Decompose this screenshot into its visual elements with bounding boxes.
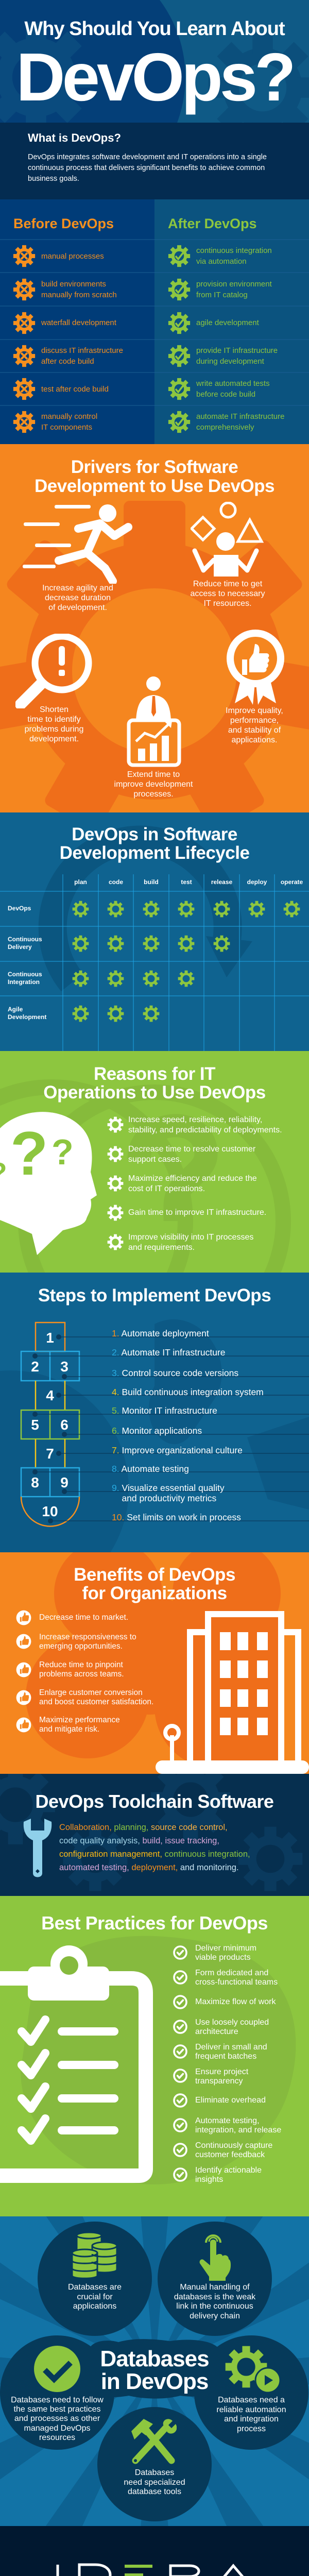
list: practices: Form dedicated and xyxy=(195,1969,268,1977)
heading: steps: Steps to Implement DevOps xyxy=(38,1285,271,1306)
hopscotch diagram: 9 xyxy=(60,1475,68,1490)
text: automation: process xyxy=(237,2425,266,2433)
hopscotch diagram: 7 xyxy=(46,1446,54,1462)
column headers: test xyxy=(181,878,192,886)
text: databases crucial: applications xyxy=(73,2302,116,2311)
icon: gear and play xyxy=(225,2345,282,2394)
list: steps: 10. Set limits on work in process xyxy=(112,1512,241,1522)
hopscotch diagram xyxy=(21,1322,309,1527)
text: manual handling xyxy=(152,2283,277,2321)
table: lifecycle stages xyxy=(8,878,303,1022)
title: databases in devops: in DevOps xyxy=(101,2369,208,2394)
text: improve quality: performance, xyxy=(230,716,279,725)
panel: reasons for IT operations xyxy=(0,1051,309,1273)
list: benefits: Increase responsiveness to xyxy=(39,1633,136,1641)
list: practices: frequent batches xyxy=(195,2052,256,2061)
column headers: plan xyxy=(74,878,87,886)
text: automation xyxy=(194,2396,308,2434)
text: tools list xyxy=(59,1821,309,1874)
list: reasons: Gain time to improve IT infrastructure. xyxy=(128,1208,266,1217)
panel: lifecycle xyxy=(0,812,309,1051)
footer: IDERA logo xyxy=(0,2526,309,2576)
text: shorten time: development. xyxy=(29,735,79,743)
callout: specialized tools xyxy=(97,2407,212,2521)
text: reduce time: IT resources. xyxy=(203,599,252,608)
list: benefits: Decrease time to market. xyxy=(39,1613,128,1622)
list: practices: architecture xyxy=(195,2027,238,2036)
heading: drivers: Development to Use DevOps xyxy=(35,476,274,496)
item: provision: from IT catalog xyxy=(196,291,248,299)
text: specialized tools: database tools xyxy=(128,2487,181,2496)
item: agile: agile development xyxy=(196,318,259,327)
heading: best practices: Best Practices for DevOps xyxy=(41,1912,268,1934)
row labels: Delivery xyxy=(8,943,32,951)
text: follow best practices: the same best practices xyxy=(14,2405,100,2414)
heading: benefits xyxy=(0,1566,309,1603)
text: manual handling: delivery chain xyxy=(190,2311,240,2320)
list: practices: cross-functional teams xyxy=(195,1978,278,1987)
heading: before devops: Before DevOps xyxy=(13,216,114,231)
list: steps: 7. Improve organizational culture xyxy=(112,1445,243,1455)
text: reduce time: Reduce time to get xyxy=(193,580,262,588)
item: test after: test after code build xyxy=(41,384,109,394)
hopscotch diagram: 10 xyxy=(42,1503,58,1519)
panel: toolchain xyxy=(0,1774,309,1896)
list: reasons: support cases. xyxy=(128,1155,182,1163)
text: tools list: automated testing, deployment, and monitoring. xyxy=(59,1863,239,1872)
list: steps: 9. Visualize essential quality xyxy=(112,1483,225,1493)
title DevOps: DevOps? xyxy=(16,39,293,115)
text: reduce time: access to necessary xyxy=(191,589,265,598)
text: specialized tools: Databases xyxy=(135,2468,174,2477)
text: increase agility: Increase agility and xyxy=(42,584,113,592)
item: automate infra xyxy=(168,411,284,433)
list: practices: integration, and release xyxy=(195,2126,281,2134)
row labels xyxy=(8,905,46,1021)
list: reasons: and requirements. xyxy=(128,1243,195,1252)
header section xyxy=(0,0,309,123)
list: practices: Maximize flow of work xyxy=(195,1997,276,2006)
item: manual processes xyxy=(13,245,104,267)
text: automation: and integration xyxy=(224,2415,279,2424)
heading: benefits: for Organizations xyxy=(82,1583,227,1603)
item: waterfall xyxy=(13,312,116,334)
icon: clipboard xyxy=(0,1945,154,2184)
list: practices: customer feedback xyxy=(195,2150,265,2159)
hopscotch diagram: 1 xyxy=(46,1330,54,1346)
text: shorten time: Shorten xyxy=(40,705,68,714)
item: automated tests: before code build xyxy=(196,390,255,399)
list: steps: 6. Monitor applications xyxy=(112,1426,202,1436)
item: provision: provision environment xyxy=(196,279,272,289)
item: manually control: manually control xyxy=(41,412,97,421)
item: discuss infra: discuss IT infrastructure xyxy=(41,346,123,355)
item: discuss infra xyxy=(13,345,123,367)
list: practices xyxy=(173,1943,309,2185)
row labels: Continuous xyxy=(8,971,42,978)
list: reasons: Improve visibility into IT processes xyxy=(128,1233,253,1242)
item: provision xyxy=(168,278,272,301)
item: waterfall: waterfall development xyxy=(41,318,116,327)
text: follow best practices xyxy=(0,2396,117,2443)
list: steps: 4. Build continuous integration system xyxy=(112,1387,264,1397)
column headers: operate xyxy=(281,878,303,886)
icon: magnifier xyxy=(15,634,92,708)
row labels: Continuous xyxy=(8,936,42,943)
text: extend time xyxy=(114,770,193,799)
list: benefits: Enlarge customer conversion xyxy=(39,1688,143,1697)
list: steps: and productivity metrics xyxy=(122,1493,216,1503)
icon: businessman chart xyxy=(127,676,181,767)
text: shorten time: time to identify xyxy=(27,715,81,724)
panel: before and after xyxy=(0,199,309,444)
list: practices: Use loosely coupled xyxy=(195,2018,269,2027)
text: follow best practices: managed DevOps xyxy=(24,2424,90,2433)
column headers: code xyxy=(109,878,123,886)
list: reasons xyxy=(107,1115,282,1252)
panel: benefits xyxy=(0,1552,309,1774)
list: reasons: cost of IT operations. xyxy=(128,1184,205,1193)
icon: head with question marks xyxy=(0,1112,97,1255)
heading: reasons xyxy=(43,1064,266,1103)
text: tools list: configuration management, continuous integration, xyxy=(59,1850,250,1859)
list: practices: viable products xyxy=(195,1953,251,1962)
row labels: Integration xyxy=(8,978,40,986)
reason 1 xyxy=(107,1115,282,1134)
gear marks xyxy=(72,901,300,1022)
item: provide infra: during development xyxy=(196,357,264,366)
hopscotch diagram: 6 xyxy=(60,1417,68,1433)
title: databases in devops: Databases xyxy=(100,2346,209,2371)
icon: database stack xyxy=(72,2232,118,2280)
heading: lifecycle: DevOps in Software xyxy=(72,824,237,844)
hopscotch diagram: 4 xyxy=(46,1387,54,1403)
text: tools list: code quality analysis, build, issue tracking, xyxy=(59,1836,219,1845)
list: benefits: Reduce time to pinpoint xyxy=(39,1660,123,1669)
text: improve quality: Improve quality, xyxy=(226,706,283,715)
text: databases crucial: Databases are xyxy=(68,2283,122,2292)
item: continuous integration: continuous integration xyxy=(196,246,272,255)
item: agile xyxy=(168,312,259,334)
list: benefits: Maximize performance xyxy=(39,1716,120,1724)
title: databases in devops xyxy=(0,2348,309,2393)
icon: pointing hand xyxy=(199,2231,232,2281)
heading: reasons: Operations to Use DevOps xyxy=(43,1082,266,1103)
callout: manual handling xyxy=(158,2222,272,2336)
item: test after xyxy=(13,378,109,400)
list: before items xyxy=(13,245,123,433)
list: practices: Ensure project xyxy=(195,2067,248,2076)
list: practices: Deliver in small and xyxy=(195,2043,267,2052)
icon: juggler xyxy=(191,502,264,577)
list: benefits: and mitigate risk. xyxy=(39,1725,99,1734)
column headers: build xyxy=(144,878,159,886)
item: continuous integration xyxy=(168,245,272,267)
list: after items xyxy=(168,245,284,433)
callout: automation xyxy=(194,2335,308,2450)
text: increase agility xyxy=(42,584,113,612)
list: benefits: emerging opportunities. xyxy=(39,1642,123,1651)
panel: steps xyxy=(0,1273,309,1552)
list: practices: Eliminate overhead xyxy=(195,2096,266,2105)
text: follow best practices: Databases need to follow xyxy=(11,2396,104,2404)
text: extend time: improve development xyxy=(114,780,193,789)
reason 5 xyxy=(107,1233,253,1252)
panel: what is devops xyxy=(0,123,309,199)
list: steps: 3. Control source code versions xyxy=(112,1368,238,1378)
text: databases crucial xyxy=(38,2283,152,2311)
text: manual handling: Manual handling of xyxy=(180,2283,250,2292)
text: follow best practices: resources xyxy=(39,2433,75,2442)
text: extend time: Extend time to xyxy=(127,770,180,779)
panel: databases in devops xyxy=(0,2216,309,2526)
list: steps: 1. Automate deployment xyxy=(112,1328,209,1338)
heading: what is devops: What is DevOps? xyxy=(28,131,121,144)
icon: award thumbs xyxy=(227,630,284,705)
reason 4 xyxy=(107,1205,266,1221)
hopscotch diagram: 8 xyxy=(31,1475,39,1490)
heading: benefits: Benefits of DevOps xyxy=(74,1565,235,1585)
reason 2 xyxy=(107,1145,255,1163)
list: practices: Continuously capture xyxy=(195,2141,272,2150)
text: manual handling: link in the continuous xyxy=(176,2302,253,2311)
text: specialized tools xyxy=(97,2468,212,2497)
list: steps: 2. Automate IT infrastructure xyxy=(112,1347,226,1358)
item: provide infra xyxy=(168,345,278,367)
text: automation: reliable automation xyxy=(216,2405,286,2414)
title line 1: Why Should You Learn About xyxy=(24,18,285,40)
item: build environments: build environments xyxy=(41,279,106,289)
item: manual processes: manual processes xyxy=(41,251,104,261)
icon: head with question marks: ? xyxy=(10,1119,48,1188)
callout: best practices for databases xyxy=(0,2335,114,2450)
icon: runner xyxy=(23,504,132,584)
item: automated tests xyxy=(168,378,270,400)
text: improve quality: and stability of xyxy=(228,726,281,735)
heading: after devops: After DevOps xyxy=(168,216,257,231)
list: steps: 8. Automate testing xyxy=(112,1464,189,1474)
icon: hammer and wrench xyxy=(130,2417,177,2465)
text: tools list: Collaboration, planning, source code control, xyxy=(59,1823,228,1832)
item: build environments xyxy=(13,278,117,301)
hopscotch diagram: 5 xyxy=(31,1417,39,1433)
icon: building xyxy=(154,1609,309,1774)
heading: reasons: Reasons for IT xyxy=(94,1064,215,1084)
reason 3 xyxy=(107,1174,257,1193)
heading: drivers xyxy=(35,457,274,496)
text: follow best practices: and processes as other xyxy=(14,2414,100,2423)
item: automated tests: write automated tests xyxy=(196,379,270,388)
row labels: DevOps xyxy=(8,905,31,912)
text: specialized tools: need specialized xyxy=(124,2478,185,2486)
item: build environments: manually from scratch xyxy=(41,291,117,299)
column headers: release xyxy=(211,878,232,886)
item: continuous integration: via automation xyxy=(196,257,247,266)
item: manually control: IT components xyxy=(41,423,92,432)
list: benefits: problems across teams. xyxy=(39,1670,124,1679)
text: reduce time xyxy=(191,580,265,608)
item: manually control xyxy=(13,411,97,433)
heading: toolchain: DevOps Toolchain Software xyxy=(36,1791,273,1812)
list: reasons: Increase speed, resilience, reliability, xyxy=(128,1115,262,1124)
list: benefits xyxy=(16,1609,170,1738)
item: automate infra: automate IT infrastructure xyxy=(196,412,284,421)
list: practices: insights xyxy=(195,2175,223,2184)
list: reasons: Maximize efficiency and reduce the xyxy=(128,1174,257,1183)
list: practices: transparency xyxy=(195,2077,243,2086)
callout: databases crucial xyxy=(38,2222,152,2336)
item: provide infra: provide IT infrastructure xyxy=(196,346,278,355)
list: reasons: Decrease time to resolve customer xyxy=(128,1145,255,1154)
list: reasons: stability, and predictability of deployments. xyxy=(128,1125,282,1134)
text: databases crucial: crucial for xyxy=(77,2293,113,2301)
row labels: Agile xyxy=(8,1006,23,1013)
list: steps: 5. Monitor IT infrastructure xyxy=(112,1405,217,1416)
text: extend time: processes. xyxy=(133,790,174,799)
text: improve quality xyxy=(226,706,283,744)
text: manual handling: databases is the weak xyxy=(174,2293,255,2301)
panel: drivers xyxy=(0,444,309,812)
heading: lifecycle xyxy=(60,824,249,863)
text: definition: DevOps integrates software development and IT operations into a single continuous process that delivers significant benefits to achieve common business goals. xyxy=(28,153,267,183)
text: shorten time xyxy=(25,705,83,743)
heading: lifecycle: Development Lifecycle xyxy=(60,843,249,863)
text: increase agility: of development. xyxy=(48,603,107,612)
column headers: deploy xyxy=(247,878,267,886)
heading: drivers: Drivers for Software xyxy=(71,457,238,477)
text: automation: Databases need a xyxy=(218,2396,285,2404)
list: benefits: and boost customer satisfaction. xyxy=(39,1698,153,1706)
list: practices: Identify actionable xyxy=(195,2166,262,2175)
row labels: Development xyxy=(8,1013,46,1021)
hopscotch diagram: 3 xyxy=(60,1359,68,1375)
icon: check circle xyxy=(33,2345,81,2393)
panel: best practices xyxy=(0,1896,309,2216)
list: practices: Deliver minimum xyxy=(195,1944,256,1953)
text: increase agility: decrease duration xyxy=(45,594,111,602)
item: discuss infra: after code build xyxy=(41,357,94,366)
icon: wrench xyxy=(23,1818,53,1878)
list: steps xyxy=(112,1328,264,1522)
item: automate infra: comprehensively xyxy=(196,423,254,432)
text: shorten time: problems during xyxy=(25,725,83,734)
icon: head with question marks: ? xyxy=(52,1132,74,1172)
hopscotch diagram: 2 xyxy=(31,1359,39,1375)
column headers xyxy=(74,878,303,886)
list: practices: Automate testing, xyxy=(195,2116,260,2125)
text: improve quality: applications. xyxy=(232,736,277,744)
